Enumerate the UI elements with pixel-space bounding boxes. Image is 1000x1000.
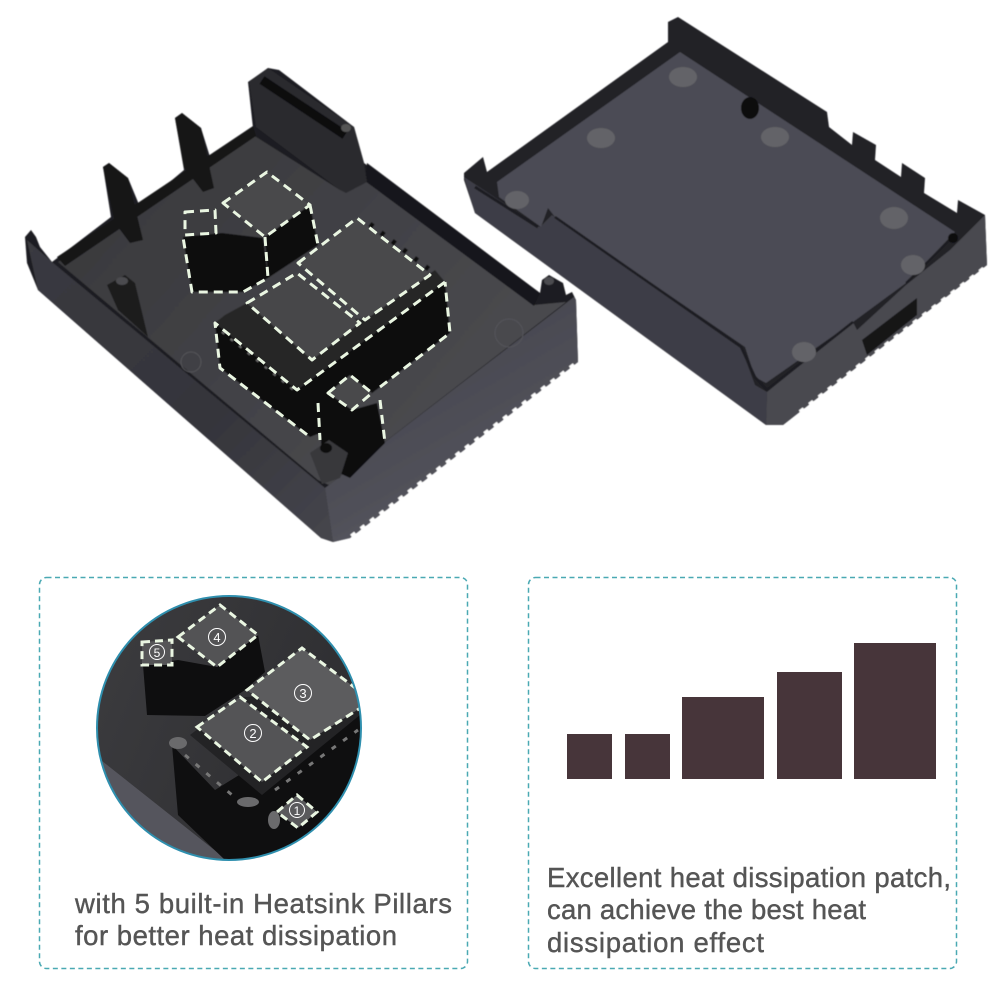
- left outer wall: [27, 240, 333, 542]
- grooves: [352, 363, 578, 537]
- pillar 5 body: [183, 233, 268, 292]
- rear black rim: [57, 126, 256, 266]
- caption: heatsink pillars: [74, 888, 452, 951]
- chip base: [215, 270, 445, 390]
- tall tab 1: [103, 163, 143, 243]
- caption: patch: [547, 862, 951, 958]
- tall tab 2: [175, 113, 214, 192]
- photo: open case with heatsink pillars: [25, 68, 578, 542]
- tall wall top slot: [262, 80, 345, 135]
- right outer wall with grooved edge: [325, 297, 578, 542]
- photo: case lid interior: [464, 17, 987, 425]
- panel: heat dissipation patches: [528, 578, 956, 968]
- number 4: [208, 628, 226, 646]
- number 1: [290, 802, 304, 818]
- pillar 3 top: [247, 648, 362, 740]
- number 5: [150, 644, 164, 660]
- pillar 3 pins: [370, 224, 430, 270]
- inner rim lines: [475, 187, 955, 390]
- lid grooves: [800, 266, 987, 412]
- pillar 4 side: [265, 205, 318, 278]
- heatsink fins block: [215, 282, 450, 437]
- number 3: [294, 684, 312, 702]
- corner post hole: [320, 443, 332, 453]
- number 2: [244, 724, 262, 742]
- caption: patch: dissipation effect: [547, 927, 764, 958]
- number 5: 5: [154, 646, 161, 660]
- mounting ears: [169, 737, 280, 829]
- lid front-left wall: [464, 177, 767, 425]
- tall rear wall: [249, 68, 367, 193]
- pillar 5 top: [142, 640, 172, 665]
- circular close-up: [97, 596, 362, 870]
- dashed outlines: [142, 605, 362, 828]
- small hole: [948, 233, 958, 243]
- small screw post: [107, 275, 148, 337]
- caption: patch: Excellent heat dissipation patch,: [547, 862, 951, 893]
- pillar 1 body: [320, 403, 385, 478]
- number 3: 3: [299, 686, 307, 701]
- pillar 3 top: [298, 218, 430, 320]
- caption: heatsink pillars: for better heat dissipation: [75, 920, 397, 951]
- pillar 5 and 4 bodies: [143, 635, 265, 716]
- screw hole on rear wall: [341, 124, 351, 132]
- close-up ring: [97, 596, 361, 860]
- round stand-off marks: [505, 67, 925, 362]
- pillar 4 top: [178, 605, 258, 667]
- panel: heatsink pillars: [40, 578, 468, 968]
- close-up image area: [97, 596, 362, 870]
- pin rows: [222, 332, 296, 392]
- pillar 2 top: [247, 273, 360, 360]
- front corner post: [310, 440, 348, 484]
- case floor: [58, 135, 566, 485]
- dashed panel border: [528, 578, 956, 968]
- number 1: 1: [294, 804, 301, 818]
- small post hole: [116, 277, 128, 285]
- pillar 2 top: [197, 697, 307, 782]
- screw boss: [741, 97, 759, 119]
- patch bars: [567, 643, 936, 779]
- chip base: [190, 695, 360, 795]
- lid front-right wall: [766, 215, 987, 425]
- dashed panel border: [40, 578, 468, 968]
- pillar 1 top: [328, 375, 372, 410]
- outer wall wedge: [102, 762, 224, 859]
- pins right: [275, 730, 358, 790]
- right black rim: [365, 163, 540, 306]
- pillar 4 top: [223, 172, 310, 237]
- lid silhouette: [464, 17, 987, 425]
- pillar 1 top: [277, 795, 317, 828]
- right screw post hole: [544, 277, 554, 285]
- number 2: 2: [249, 726, 257, 741]
- caption: patch: can achieve the best heat: [547, 894, 866, 925]
- caption: heatsink pillars: with 5 built-in Heatsink Pillars: [74, 888, 452, 919]
- faint floor circles: [181, 319, 523, 372]
- pillar 5 top: [185, 210, 216, 235]
- dashed pillar outlines: [183, 172, 450, 443]
- pins: [185, 755, 232, 795]
- heatsink block: [172, 716, 360, 859]
- number 4: 4: [213, 630, 221, 645]
- side port slot: [862, 298, 917, 355]
- lid inner floor: [497, 52, 955, 383]
- case body silhouette: [25, 68, 578, 542]
